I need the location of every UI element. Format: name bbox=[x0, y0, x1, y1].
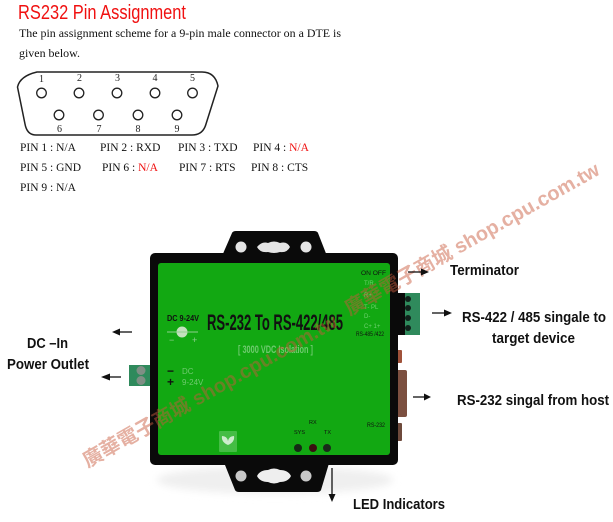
pin assignment list: PIN 9 : N/A bbox=[20, 182, 77, 194]
DIP switch labels bbox=[356, 271, 386, 429]
pin assignment list: PIN 3 : TXD bbox=[178, 142, 238, 154]
label: LED indicators: LED Indicators bbox=[353, 497, 445, 513]
DIP switch labels: T- PL bbox=[364, 305, 379, 311]
intro text: The pin assignment scheme for a 9-pin male connector on a DTE is bbox=[19, 28, 342, 40]
connector diagram: 9 bbox=[174, 124, 180, 135]
power polarity labels: DC bbox=[182, 367, 194, 376]
label: RS-422 / 485: target device bbox=[492, 331, 575, 347]
LEDs: SYS bbox=[294, 430, 305, 436]
connector diagram: 8 bbox=[136, 124, 140, 135]
pin assignment list: PIN 6 : N/A bbox=[102, 162, 159, 174]
power polarity labels: 9-24V bbox=[182, 378, 204, 387]
watermark: lower left: 廣華電子商城 shop.cpu.com.tw bbox=[78, 309, 342, 472]
bottom slot bbox=[257, 468, 291, 484]
pin assignment list: PIN 8 : CTS bbox=[251, 162, 308, 174]
label: RS-422 / 485 bbox=[462, 310, 606, 347]
power polarity labels: − bbox=[167, 364, 174, 378]
logo bbox=[219, 431, 237, 452]
connector diagram: 4 bbox=[152, 73, 158, 84]
connector diagram: 6 bbox=[57, 124, 62, 135]
intro text: given below. bbox=[19, 48, 80, 60]
connector diagram: 2 bbox=[77, 73, 82, 84]
device bbox=[129, 231, 420, 494]
DIP switch labels: C+ 1+ bbox=[364, 324, 381, 330]
connector diagram bbox=[18, 72, 218, 135]
label: terminator: Terminator bbox=[450, 263, 519, 279]
device label: RS-232 To RS-422/485 bbox=[207, 310, 343, 335]
arrow: power outlet bbox=[101, 374, 121, 380]
watermark: upper right: 廣華電子商城 shop.cpu.com.tw bbox=[340, 157, 604, 320]
arrow: RS-422 bbox=[432, 310, 452, 316]
DIP switch labels: R+ bbox=[364, 293, 372, 299]
RS-422 terminal block bbox=[395, 293, 420, 335]
DC jack: − bbox=[169, 335, 174, 345]
connector diagram: 7 bbox=[96, 124, 102, 135]
LEDs: TX bbox=[324, 430, 331, 436]
arrow: terminator bbox=[408, 268, 429, 276]
DIP switch labels: ON OFF bbox=[361, 271, 386, 277]
DIP switch labels: RS-232 bbox=[367, 423, 386, 429]
DIP switch labels: RS-485 /422 bbox=[356, 332, 385, 338]
pin assignment list: PIN 1 : N/A bbox=[20, 142, 77, 154]
arrow: RS-232 bbox=[413, 394, 431, 400]
DC jack: + bbox=[192, 335, 197, 345]
pin assignment list: PIN 7 : RTS bbox=[179, 162, 236, 174]
arrow: DC in bbox=[112, 328, 132, 336]
power polarity labels: + bbox=[167, 375, 174, 389]
DC jack: DC 9-24V bbox=[167, 314, 200, 323]
arrow: LED bbox=[328, 468, 336, 502]
DC jack bbox=[167, 314, 200, 345]
title: RS232 Pin Assignment bbox=[18, 2, 186, 24]
pin assignment list: PIN 4 : N/A bbox=[253, 142, 310, 154]
power polarity labels bbox=[167, 364, 204, 389]
connector diagram: 5 bbox=[190, 73, 195, 84]
LEDs bbox=[294, 420, 331, 452]
green panel bbox=[158, 263, 390, 455]
pin assignment list: PIN 2 : RXD bbox=[100, 142, 160, 154]
connector diagram: 1 bbox=[39, 74, 44, 85]
intro text bbox=[19, 28, 342, 60]
pin assignment list: PIN 5 : GND bbox=[20, 162, 81, 174]
DIP switch labels: T/R bbox=[364, 281, 374, 287]
LEDs: RX bbox=[309, 420, 317, 426]
mounting tabs bbox=[222, 231, 330, 492]
DB9 connector bbox=[395, 350, 407, 441]
case bbox=[150, 253, 398, 465]
label: DC in / power outlet: Power Outlet bbox=[7, 357, 89, 373]
isolation label: [ 3000 VDC Isolation ] bbox=[238, 344, 313, 356]
label: DC in / power outlet bbox=[7, 336, 89, 373]
label: DC in / power outlet: DC –In bbox=[27, 336, 68, 352]
DIP switch labels: D- bbox=[364, 314, 370, 320]
power terminal block bbox=[129, 365, 151, 386]
connector diagram: 3 bbox=[115, 73, 120, 84]
pin assignment list bbox=[20, 142, 310, 194]
